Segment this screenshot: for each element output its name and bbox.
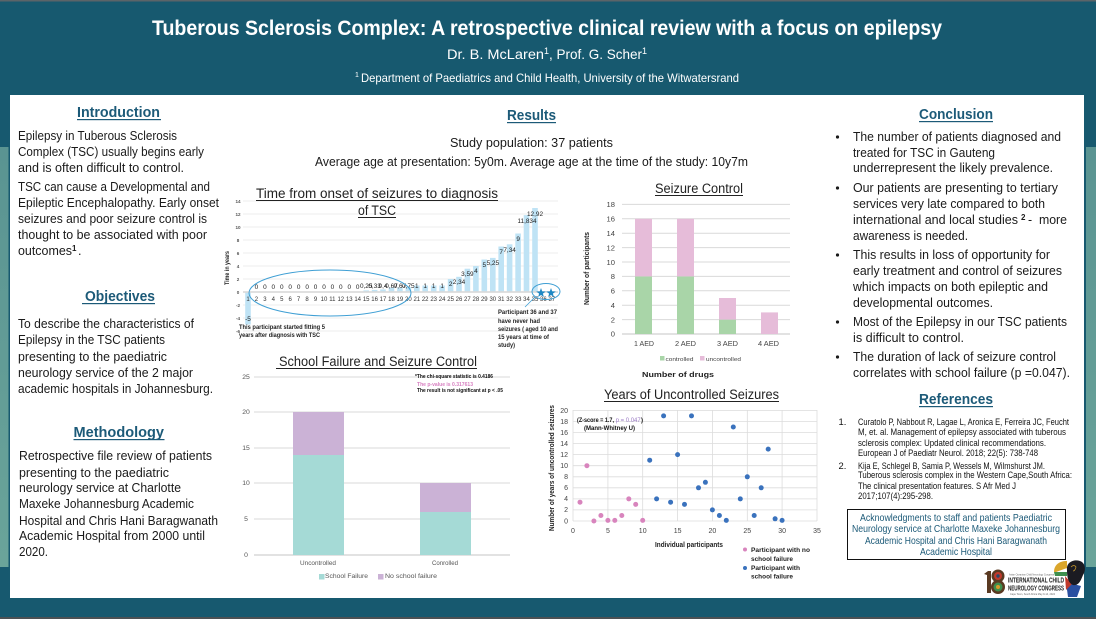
data labels: 1 (423, 283, 427, 290)
y axis labels (235, 199, 241, 334)
text: introduction body: Epileptic Encephalopathy. Early onset (18, 196, 219, 210)
text: objectives body: To describe the characteristics of (18, 317, 194, 331)
text: introduction body: seizures and poor seizure control is (18, 212, 207, 226)
panel: methodology (19, 425, 218, 559)
statistics note: The p-value is 0.317613 (417, 382, 473, 388)
text: introduction body: Epilepsy in Tuberous Sclerosis (18, 129, 177, 143)
y axis labels: 0 (237, 290, 240, 295)
text: conclusion points: is difficult to control. (853, 331, 964, 345)
text: average ages: Average age at presentation: 5y0m. Average age at the time of the study: 10y7m (315, 155, 748, 169)
affiliation: Department of Paediatrics and Child Health, University of the Witwatersrand (361, 71, 739, 85)
y axis title: Time in years (224, 251, 231, 285)
panel: references (838, 392, 1072, 501)
legend: school failure (751, 556, 793, 563)
panel: objectives (18, 289, 213, 396)
data labels: 0 (314, 284, 318, 291)
participant numbers: 34 (523, 297, 530, 303)
annotation: participant started fitting: This participant started fitting 5 (239, 324, 325, 331)
data labels: 5 (483, 262, 487, 269)
text: reference 2: Kija E, Schlegel B, Samia P, Wessels M, Wilmshurst JM. (858, 460, 1045, 471)
callout: acknowledgments: Acknowledgments to staff and patients Paediatric (860, 513, 1052, 524)
category labels: 2 AED (675, 341, 696, 348)
y axis labels: 0 (611, 330, 615, 338)
data labels: 0,67 (394, 283, 407, 290)
data labels: 1 (432, 283, 436, 290)
stacked bars (635, 219, 778, 334)
chart title: Time from onset of seizures to diagnosis (256, 186, 498, 201)
y axis labels: 12 (607, 244, 615, 252)
y axis title: Number of participants (584, 232, 591, 305)
annotation: participants without seizures: study) (498, 342, 515, 349)
chart: time from onset of seizures to diagnosis (224, 186, 560, 349)
annotation: participant started fitting (239, 324, 325, 339)
y axis labels: 2 (237, 277, 240, 282)
data labels: 11,834 (517, 218, 537, 225)
data labels: 0 (322, 284, 326, 291)
text: reference 1 (838, 416, 1069, 458)
participant numbers: 16 (371, 297, 379, 303)
header (152, 17, 942, 85)
data labels: 0 (297, 284, 301, 291)
participant numbers: 5 (280, 297, 284, 303)
text: conclusion points: treated for TSC in Gauteng (853, 146, 995, 160)
data labels: 0 (288, 284, 292, 291)
data labels: 2,34 (453, 279, 466, 286)
chart: years of uncontrolled seizures: 20 (709, 528, 716, 535)
annotation: participants without seizures: seizures ( aged 10 and (498, 326, 558, 333)
panel: conclusion (836, 107, 1070, 380)
text: reference 2: 2. (838, 460, 846, 471)
data labels (245, 211, 543, 323)
y axis labels: 10 (242, 480, 250, 487)
axis labels: 16 (560, 430, 568, 437)
data labels: 2 (449, 281, 453, 288)
text: conclusion points: This results in loss of opportunity for (853, 248, 1050, 262)
text: congress name: Asian Oceanian Child Neurology Congress (1009, 572, 1054, 576)
statistics note: p = 0.047 (616, 418, 641, 424)
participant numbers: 13 (346, 297, 353, 303)
text: reference 2 (838, 460, 1072, 501)
category labels: Uncontrolled (300, 560, 336, 567)
panel: results intro (315, 108, 748, 169)
category labels (634, 341, 779, 348)
axis labels: 2 (564, 507, 568, 514)
legend (743, 547, 810, 580)
statistics note: ) (641, 418, 643, 424)
text: conclusion points: The duration of lack of seizure control (853, 350, 1056, 364)
text: objectives body: academic hospitals in Johannesburg. (18, 382, 213, 396)
white content panel (10, 95, 1084, 598)
axis labels (560, 408, 568, 526)
text: congress name: Cape Town, South Africa May 9-14, 2024 (1010, 592, 1055, 596)
text: conclusion points: correlates with school failure (p =0.047). (853, 366, 1070, 380)
participant numbers: 6 (289, 297, 293, 303)
authors: , Prof. G. Scher (549, 46, 642, 62)
y axis labels: 16 (607, 214, 615, 224)
axis labels: 10 (560, 463, 568, 470)
chart title: School Failure and Seizure Control (279, 354, 477, 369)
callout: acknowledgments: Academic Hospital (920, 547, 992, 558)
authors (447, 46, 647, 62)
axis labels: 12 (560, 452, 568, 459)
participant numbers: 17 (380, 297, 387, 303)
legend: school failure (751, 574, 793, 580)
y axis labels: 14 (607, 229, 615, 238)
statistics note: (Z-score = 1.7, (577, 418, 614, 424)
statistics note: The result is not significant at p < .05 (417, 388, 503, 394)
title: Tuberous Sclerosis Complex: A retrospective clinical review with a focus on epilepsy (152, 17, 942, 40)
participant numbers: 18 (388, 297, 395, 303)
y axis title: Number of years of uncontrolled seizures (547, 405, 556, 531)
logo: International Child Neurology Congress (984, 560, 1085, 597)
text: objectives body: presenting to the paediatric (18, 350, 167, 364)
participant numbers: 27 (464, 297, 471, 303)
category labels: 1 AED (634, 341, 654, 348)
data labels: 0 (280, 284, 284, 291)
participant numbers: 19 (397, 297, 404, 303)
text: introduction body: thought to be associated with poor (18, 228, 207, 242)
text: objectives body: neurology service of the 2 major (18, 366, 193, 380)
text: conclusion points: The number of patients diagnosed and (853, 130, 1061, 144)
bullets (836, 135, 839, 359)
category labels (300, 560, 458, 567)
text: reference 2: 2017;107(4):295-298. (858, 490, 933, 501)
participant numbers: 24 (439, 297, 446, 303)
category labels: Conrolled (432, 560, 458, 567)
ellipse: participants 36 and 37 (525, 284, 560, 307)
data labels: -5 (245, 316, 251, 323)
y axis labels: 2 (611, 316, 615, 324)
chart: years of uncontrolled seizures: 25 (743, 528, 751, 535)
heading: Conclusion: Conclusion (919, 107, 993, 123)
text: methodology body (19, 449, 218, 559)
legend: School Failure (325, 573, 368, 580)
affiliation: 1 (355, 72, 359, 79)
y axis labels: -6 (236, 329, 240, 334)
y axis labels: 10 (235, 225, 241, 230)
participant numbers: 11 (329, 297, 336, 303)
participant numbers: 31 (498, 297, 505, 303)
data labels: 0 (331, 284, 335, 291)
participant numbers: 26 (456, 297, 463, 303)
y axis labels: 20 (242, 409, 250, 416)
data labels: 0 (272, 284, 276, 291)
legend (660, 356, 741, 363)
participant numbers: 21 (413, 297, 421, 303)
panel: introduction (18, 105, 219, 258)
chart title: Years of Uncontrolled Seizures (604, 387, 779, 402)
text: conclusion points: early treatment and control of seizures (853, 264, 1062, 278)
data labels: 7,34 (503, 247, 516, 254)
data labels: 3,59 (461, 271, 474, 278)
text: reference 1: 1. (838, 416, 846, 427)
statistics note: (Mann-Whitney U) (584, 426, 635, 432)
legend: controlled (666, 357, 694, 363)
data labels: 0,33 (368, 283, 381, 290)
data labels: 0 (263, 284, 267, 291)
text: reference 1: sclerosis complex: Updated clinical recommendations. (858, 437, 1046, 448)
y axis labels: 14 (235, 199, 241, 204)
data labels: 0,25 (360, 283, 373, 290)
annotation: participant started fitting: years after diagnosis with TSC (239, 332, 320, 339)
category labels: 4 AED (758, 341, 779, 348)
statistics note: *The chi-square statistic is 0.4186 (415, 374, 493, 380)
authors: 1 (544, 46, 549, 56)
stacked bars (293, 412, 471, 555)
authors: Dr. B. McLaren (447, 46, 544, 62)
text: methodology body: neurology service at Charlotte (19, 481, 181, 495)
chart title: of TSC (358, 203, 396, 218)
icons: stars for participants 36 and 37 (536, 288, 556, 297)
chart: years of uncontrolled seizures: 10 (639, 528, 647, 535)
text: reference 2: The clinical presentation features. S Afr Med J (858, 480, 1016, 491)
text: conclusion points: international and local studies (853, 213, 1018, 227)
heading: Introduction: Introduction (77, 105, 160, 121)
y axis labels: 6 (237, 251, 240, 256)
chart: years of uncontrolled seizures: 0 (571, 528, 575, 535)
ellipse: participants diagnosed at onset (249, 270, 411, 316)
text: introduction body: 1 (72, 244, 77, 253)
chart: school failure and seizure control (242, 354, 510, 580)
bars (245, 208, 538, 324)
data labels: 0 (356, 284, 360, 291)
chart: years of uncontrolled seizures: 35 (813, 528, 821, 535)
participant numbers: 3 (263, 297, 267, 303)
text: conclusion points (852, 130, 1070, 380)
participant numbers: 37 (548, 297, 556, 303)
axis labels: 6 (564, 485, 568, 492)
callout: acknowledgments: Neurology service at Charlotte Maxeke Johannesburg (852, 524, 1060, 535)
text: methodology body: Maxeke Johannesburg Academic (19, 497, 194, 511)
data labels: 1 (415, 283, 419, 290)
legend (319, 573, 437, 580)
points: school failure (647, 413, 785, 523)
participant numbers: 20 (405, 297, 412, 303)
axis labels: 18 (560, 419, 568, 426)
points: no school failure (578, 463, 645, 524)
callout: acknowledgments: Academic Hospital and Chris Hani Baragwanath (865, 536, 1047, 547)
data labels: 9 (516, 236, 520, 243)
text: introduction body: TSC can cause a Developmental and (18, 180, 210, 194)
annotation: participants without seizures: have never had (498, 318, 540, 325)
text: study population: Study population: 37 patients (450, 136, 613, 150)
text: congress name (1008, 572, 1064, 596)
text: introduction body: Complex (TSC) usually begins early (18, 145, 205, 159)
data labels: 7 (499, 249, 503, 256)
text: congress name: INTERNATIONAL CHILD (1008, 576, 1064, 584)
authors: 1 (642, 46, 647, 56)
data labels: 0,4 (379, 283, 388, 290)
text: introduction body (18, 129, 219, 258)
participant numbers: 9 (314, 297, 318, 303)
legend: uncontrolled (706, 357, 741, 363)
heading: Methodology: Methodology (74, 425, 164, 441)
y axis labels: 10 (607, 258, 615, 267)
participant numbers: 28 (473, 297, 480, 303)
heading: Objectives: Objectives (85, 289, 155, 305)
chart: seizure control (584, 181, 790, 379)
y axis labels: 15 (242, 445, 250, 452)
participant numbers: 15 (363, 297, 370, 303)
text: methodology body: Hospital and Chris Hani Baragwanath (19, 514, 218, 528)
data labels: 0 (348, 284, 352, 291)
icon: child figure (1054, 560, 1085, 597)
x axis title: Individual participants (655, 542, 723, 549)
data labels: 4 (474, 268, 478, 275)
participant numbers: 7 (297, 297, 301, 303)
legend: Participant with (751, 565, 800, 572)
axis labels: 0 (564, 518, 568, 526)
chart title: Seizure Control (655, 181, 743, 196)
participant numbers: 22 (422, 297, 429, 303)
text: conclusion points: - more (1028, 213, 1067, 227)
text: conclusion points: developmental outcomes. (853, 296, 993, 310)
annotation: participants without seizures: 15 years at time of (498, 334, 550, 341)
heading: Results: Results (507, 108, 556, 124)
data labels: 0 (339, 284, 343, 291)
annotation: participants without seizures (498, 309, 558, 349)
y axis labels: 8 (611, 272, 615, 281)
chart title (256, 186, 498, 218)
participant numbers: 25 (447, 297, 455, 303)
participant numbers: 8 (305, 297, 309, 303)
data labels: 0 (255, 284, 259, 291)
text: objectives body: Epilepsy in the TSC patients (18, 333, 165, 347)
y axis labels: 25 (242, 374, 250, 381)
axis labels: 8 (564, 474, 568, 481)
legend: No school failure (385, 573, 437, 580)
text: reference 1: European J of Paediatr Neurol. 2018; 22(5): 738-748 (858, 447, 1038, 458)
annotation: participants without seizures: Participant 36 and 37 (498, 309, 557, 316)
text: introduction body: and is often difficult to control. (18, 161, 184, 175)
chart: years of uncontrolled seizures: 5 (606, 528, 610, 535)
data labels: 0,75 (402, 283, 415, 290)
y axis labels: 18 (607, 200, 615, 209)
y axis labels: 8 (237, 238, 240, 243)
text: conclusion points: which impacts on both epileptic and (852, 280, 1048, 294)
category labels: 3 AED (717, 341, 738, 348)
participant numbers: 1 (246, 297, 250, 303)
y axis labels: 4 (611, 301, 615, 310)
participant numbers: 32 (506, 297, 514, 303)
data labels: 0 (305, 284, 309, 291)
y axis labels: 0 (244, 552, 248, 559)
text: methodology body: presenting to the paediatric (19, 466, 169, 480)
statistics note (415, 374, 503, 394)
text: conclusion points: 2 (1021, 213, 1026, 222)
participant numbers: 29 (481, 297, 488, 303)
chart: years of uncontrolled seizures (547, 387, 821, 580)
participant numbers: 2 (255, 297, 259, 303)
text: methodology body: 2020. (19, 545, 48, 559)
data labels: 1 (440, 283, 444, 290)
y axis labels: 5 (244, 516, 248, 523)
y axis labels (607, 200, 615, 338)
text: introduction body: outcomes (18, 244, 72, 258)
axis labels: 14 (560, 441, 568, 448)
y axis labels: 4 (237, 264, 240, 269)
chart: years of uncontrolled seizures: 15 (674, 528, 682, 535)
data labels: 0,67 (385, 283, 398, 290)
participant numbers: 14 (354, 297, 362, 303)
axis labels: 20 (560, 408, 568, 415)
y axis labels (242, 374, 250, 559)
callout: acknowledgments (848, 510, 1066, 560)
participant numbers (246, 297, 556, 303)
legend: Participant with no (751, 547, 810, 554)
x axis title: Number of drugs (642, 370, 714, 379)
y axis labels: 6 (611, 286, 615, 296)
y axis labels: 12 (235, 212, 241, 217)
heading: References: References (919, 392, 993, 408)
participant numbers: 36 (540, 297, 547, 303)
y axis labels: -4 (236, 316, 240, 321)
participant numbers: 33 (515, 297, 522, 303)
text: conclusion points: Our patients are presenting to tertiary (853, 181, 1059, 195)
data labels: 5,25 (487, 260, 499, 267)
axis labels: 4 (564, 496, 568, 503)
participant numbers: 10 (321, 297, 328, 303)
participant numbers: 12 (337, 297, 345, 303)
text: conclusion points: services very late compared to both (853, 197, 1045, 211)
text: methodology body: Retrospective file review of patients (19, 449, 212, 463)
statistics note (577, 418, 643, 432)
y axis labels: -2 (236, 303, 240, 308)
text: conclusion points: Most of the Epilepsy in our TSC patients (853, 315, 1067, 329)
text: methodology body: Academic Hospital from 2000 until (19, 529, 205, 543)
text: introduction body: . (78, 244, 82, 258)
data labels: 12,92 (527, 211, 543, 218)
text: conclusion points: underrepresent the likely prevalence. (853, 161, 1053, 175)
text: conclusion points: awareness is needed. (853, 229, 968, 243)
icon: congress number 18 (984, 570, 1005, 594)
chart: years of uncontrolled seizures: 30 (778, 528, 786, 535)
participant numbers: 23 (430, 297, 438, 303)
participant numbers: 35 (532, 297, 539, 303)
participant numbers: 30 (489, 297, 497, 303)
participant numbers: 4 (272, 297, 276, 303)
text: objectives body (18, 317, 213, 396)
